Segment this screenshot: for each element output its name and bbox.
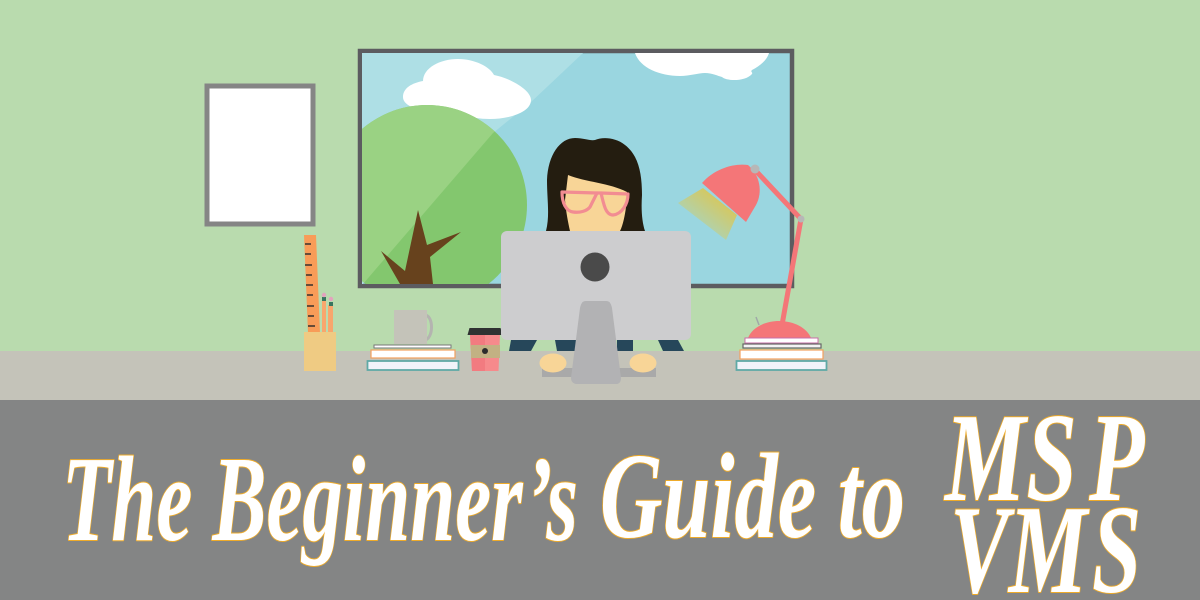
lamp light beam <box>678 188 737 240</box>
title banner <box>0 400 1200 600</box>
title text <box>62 388 1145 600</box>
monitor legs and arms <box>509 340 684 351</box>
cloud left <box>403 59 531 119</box>
coffee cup <box>468 328 502 371</box>
title: MSP: S <box>1026 388 1077 528</box>
title: MSP: M <box>943 388 1028 528</box>
person <box>546 138 645 231</box>
holder cup <box>304 332 336 371</box>
monitor <box>501 231 691 384</box>
lamp shade <box>702 165 760 222</box>
right book stack <box>736 338 826 370</box>
lamp arm <box>755 170 801 325</box>
window glare <box>362 53 583 284</box>
glasses <box>562 192 628 215</box>
hair <box>546 138 645 231</box>
empty picture frame <box>207 86 313 224</box>
title: MSP: P <box>1088 388 1145 528</box>
title: Guide to: Guide to <box>600 429 905 564</box>
hands <box>540 354 656 372</box>
cloud right <box>635 53 769 80</box>
face <box>565 175 627 231</box>
keyboard <box>542 368 656 377</box>
wall <box>0 0 1200 351</box>
mug <box>394 310 432 344</box>
tree <box>362 105 527 284</box>
cup lid <box>468 328 502 335</box>
title: The Beginner's: The Beginner’s <box>62 432 578 567</box>
ruler <box>304 235 320 333</box>
lamp base <box>748 321 811 338</box>
desk lamp <box>678 164 811 338</box>
desk <box>0 351 1200 401</box>
left book stack <box>368 345 458 370</box>
pencils <box>322 293 333 333</box>
window <box>358 48 794 288</box>
monitor logo <box>580 252 610 282</box>
pencil holder with ruler and pencils <box>304 235 336 371</box>
tree trunk <box>381 210 461 284</box>
monitor stand <box>571 301 621 384</box>
